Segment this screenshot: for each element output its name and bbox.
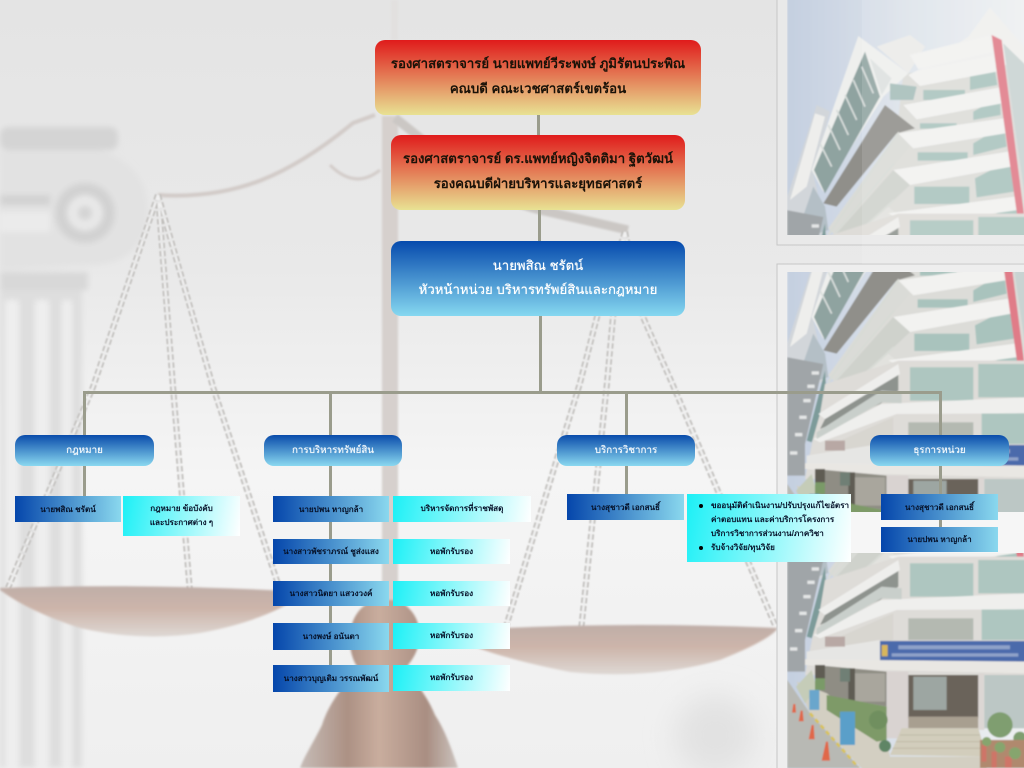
left pan (0, 586, 306, 637)
academic: staff (567, 494, 684, 520)
asset: duty 3: หอพักรับรอง (430, 588, 473, 598)
asset: staff 3: นางสาวนิตยา แสวงวงค์ (290, 589, 372, 598)
law: duties: และประกาศต่าง ๆ (150, 518, 213, 527)
academic: duties list: ขออนุมัติดำเนินงาน/ปรับปรุงแก้ไขอัตรา (711, 501, 849, 510)
asset: duty 4: หอพักรับรอง (430, 631, 473, 640)
heading: academic services (557, 435, 695, 466)
asset: duty 5: หอพักรับรอง (430, 673, 473, 682)
asset: duty 2 (393, 539, 510, 564)
box: head of unit (391, 241, 685, 316)
academic: duties list: รับจ้างวิจัย/ทุนวิจัย (711, 543, 775, 552)
box: dean: รองศาสตราจารย์ นายแพทย์วีระพงษ์ ภูมิรัตนประพิณ (391, 56, 685, 71)
heading: asset management: การบริหารทรัพย์สิน (292, 445, 374, 456)
law: staff: นายพสิณ ชรัตน์ (40, 504, 96, 514)
asset: staff 5: นางสาวบุญเติม วรรณพัฒน์ (284, 674, 378, 683)
box: dean: คณบดี คณะเวชศาสตร์เขตร้อน (450, 81, 626, 96)
box: dean (375, 40, 701, 115)
box: head of unit: หัวหน้าหน่วย บริหารทรัพย์สินและกฎหมาย (419, 282, 657, 296)
asset: duty 2: หอพักรับรอง (430, 546, 473, 556)
beam (158, 115, 628, 230)
heading: unit administration: ธุรการหน่วย (913, 445, 966, 456)
administration: staff 1 (881, 494, 998, 520)
administration: staff 1: นางสุชาวดี เอกสนธิ์ (905, 502, 974, 512)
asset: staff 5 (273, 665, 389, 692)
box: deputy dean: รองคณบดีฝ่ายบริหารและยุทธศาสตร์ (434, 176, 642, 191)
law: duties (123, 496, 240, 536)
box: deputy dean: รองศาสตราจารย์ ดร.แพทย์หญิงจิตติมา ฐิตวัฒน์ (403, 151, 673, 166)
asset: staff 2: นางสาวพัชราภรณ์ ชูส่งแสง (283, 547, 379, 556)
pillar (0, 127, 148, 768)
asset: staff 1: นายปพน หาญกล้า (299, 504, 363, 514)
asset: duty 4 (393, 623, 510, 649)
academic: duties list (687, 494, 851, 562)
asset: duty 1 (393, 496, 531, 522)
heading: asset management (264, 435, 402, 466)
box: deputy dean (391, 135, 685, 210)
heading: unit administration (870, 435, 1009, 466)
administration: staff 2: นายปพน หาญกล้า (907, 535, 972, 544)
heading: law: กฎหมาย (66, 445, 103, 456)
asset: duty 1: บริหารจัดการที่ราชพัสดุ (421, 504, 503, 513)
heading: law (15, 435, 154, 466)
law: staff (15, 496, 121, 522)
chains (8, 195, 775, 640)
asset: duty 3 (393, 581, 510, 606)
top building photo (787, 0, 1024, 235)
asset: staff 1 (273, 496, 389, 522)
asset: staff 4 (273, 623, 389, 650)
academic: staff: นางสุชาวดี เอกสนธิ์ (591, 502, 660, 512)
asset: staff 4: นางพงษ์ อนันตา (303, 632, 359, 641)
lower building photo (787, 553, 1024, 768)
asset: staff 3 (273, 581, 389, 606)
academic: duties list: ค่าตอบแทน และค่าบริการโครงการ (711, 515, 834, 524)
right pan (478, 625, 778, 674)
box: head of unit: นายพสิณ ชรัตน์ (493, 258, 583, 272)
middle building photo (787, 272, 1024, 512)
asset: staff 2 (273, 539, 389, 564)
heading: academic services: บริการวิชาการ (595, 445, 657, 456)
asset: duty 5 (393, 665, 510, 691)
administration: staff 2 (881, 527, 998, 552)
law: duties: กฎหมาย ข้อบังคับ (150, 504, 213, 513)
academic: duties list: บริการวิชาการส่วนงาน/ภาควิชา (711, 529, 824, 538)
post and base (300, 0, 458, 768)
building frame panels (777, 0, 1024, 768)
